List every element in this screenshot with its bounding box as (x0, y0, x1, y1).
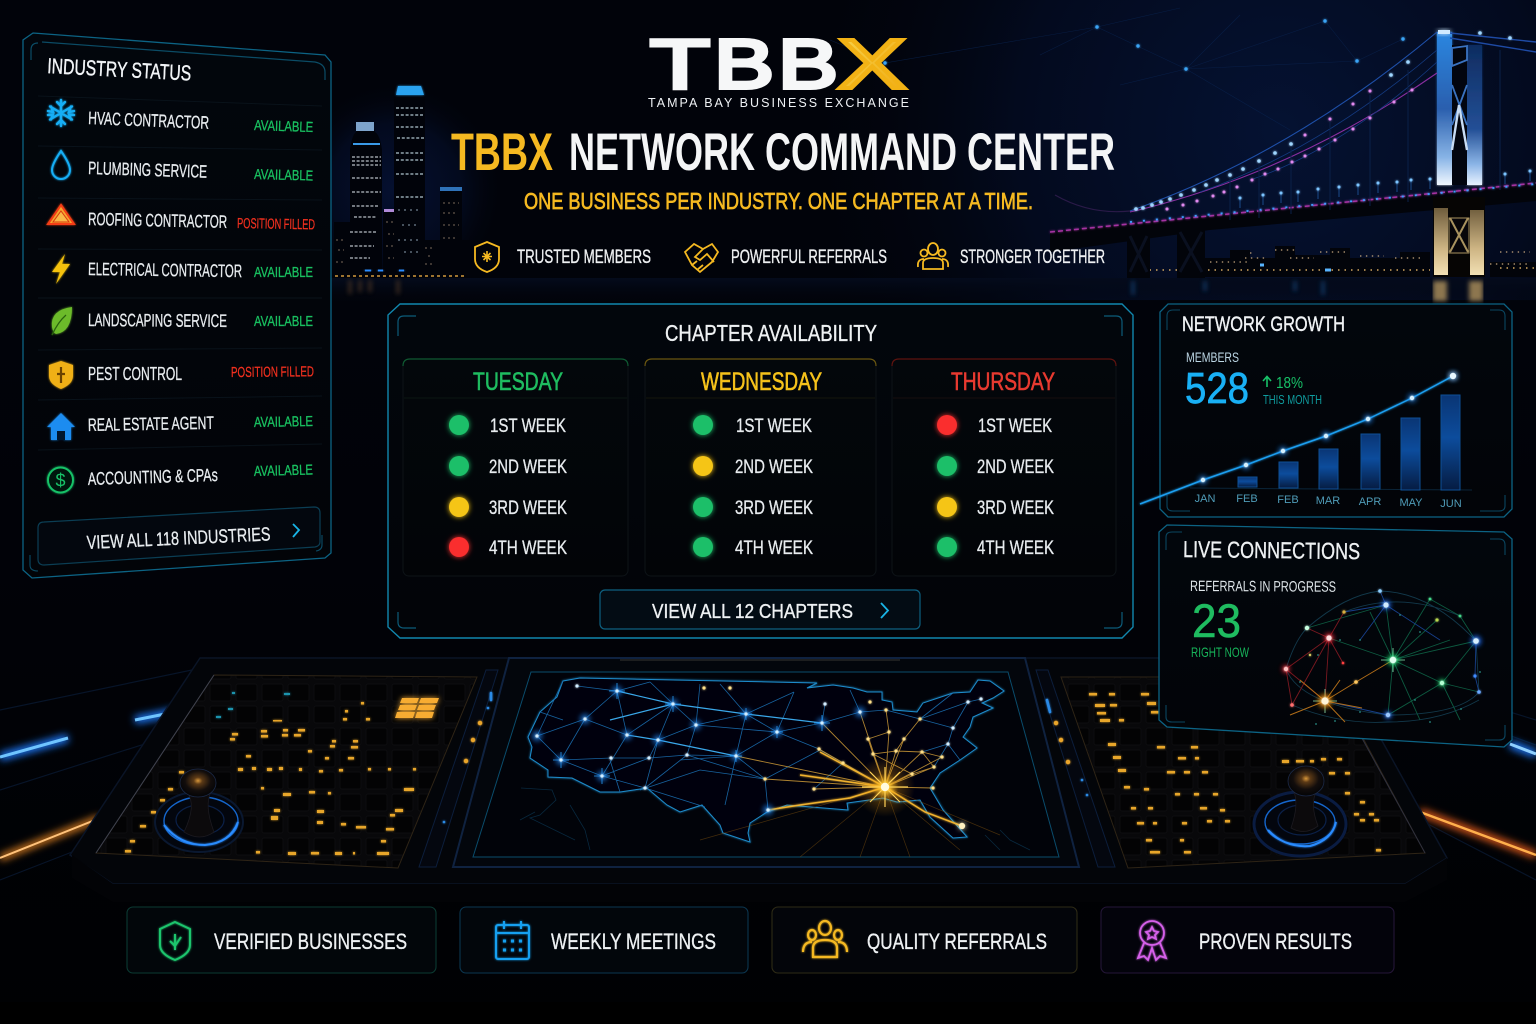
card: tuesday: TUESDAY (473, 368, 563, 396)
map: faint mexico and canada lines (520, 788, 1030, 850)
chart: axis labels: FEB (1236, 493, 1258, 505)
right now label: RIGHT NOW (1191, 644, 1250, 660)
icon: gold people (803, 921, 847, 957)
icon: shield (49, 361, 73, 389)
row: plumbing: AVAILABLE (254, 167, 314, 185)
logo: B (778, 25, 838, 103)
right joystick (1254, 766, 1346, 856)
center strips with lights (419, 670, 498, 867)
row: roofing: ROOFING CONTRACTOR (88, 209, 227, 232)
growth delta: 18% (1276, 375, 1303, 392)
members value: 528 (1185, 364, 1249, 413)
chart: axis labels: JUN (1440, 498, 1462, 510)
bottom stat: proven results (1101, 907, 1394, 973)
bridge deck (1050, 183, 1536, 252)
icon: three people (918, 243, 948, 269)
growth delta: THIS MONTH (1263, 392, 1322, 407)
map: node star rays (553, 683, 830, 784)
far skyline (1130, 246, 1536, 277)
row: roofing (48, 205, 315, 233)
small scattered nodes (1300, 615, 1480, 724)
map: network lines (537, 681, 981, 810)
shoreline lights (335, 275, 465, 277)
logo: TAMPA BAY BUSINESS EXCHANGE (648, 96, 909, 110)
card: tuesday: 4TH WEEK (489, 537, 567, 559)
logo: T (650, 25, 710, 103)
card: thursday: 1ST WEEK (978, 415, 1052, 437)
row: landscaping (52, 307, 313, 335)
bottom stat: quality referrals: QUALITY REFERRALS (867, 929, 1047, 954)
bridge (1050, 30, 1536, 301)
panel: chapter availability (388, 304, 1133, 638)
card: thursday: 2ND WEEK (977, 456, 1054, 478)
icon: snowflake (48, 100, 74, 126)
map: gold nodes (704, 688, 942, 789)
button: view all chapters: VIEW ALL 12 CHAPTERS (652, 600, 853, 623)
title: NETWORK COMMAND CENTER (569, 123, 1115, 182)
card: wednesday: 3RD WEEK (735, 497, 813, 519)
icon: dollar coin: $ (55, 470, 66, 490)
row: accounting: AVAILABLE (254, 462, 313, 480)
console body (70, 658, 1447, 884)
chart: axis labels (1195, 493, 1462, 510)
left panel indicator lights (125, 702, 416, 855)
heading: CHAPTER AVAILABILITY (665, 320, 877, 346)
chart: axis labels: JAN (1195, 493, 1215, 505)
logo (648, 25, 909, 110)
deck lamp posts (1240, 171, 1530, 208)
row: hvac: AVAILABLE (254, 118, 314, 136)
icon: dollar coin (48, 468, 73, 492)
card: tuesday (403, 359, 628, 576)
map: tampa hub flare (855, 757, 965, 829)
control console (70, 658, 1447, 902)
card: tuesday: 3RD WEEK (489, 497, 567, 519)
row: pest control: POSITION FILLED (231, 364, 314, 381)
tower one (350, 122, 382, 278)
chart: axis labels: FEB (1277, 494, 1299, 506)
chart: bars (1190, 395, 1472, 490)
bridge pier (1433, 197, 1485, 277)
button: view all industries: VIEW ALL 118 INDUSTRIES (86, 524, 271, 554)
row: real estate: AVAILABLE (254, 414, 313, 431)
row: accounting: ACCOUNTING & CPAs (87, 465, 218, 489)
icon: purple ribbon (1138, 921, 1166, 960)
card: thursday: 4TH WEEK (977, 537, 1054, 559)
side light streaks and deck floor (0, 660, 1536, 880)
map: blue node glows (537, 691, 860, 810)
icon: lightning bolt (52, 254, 70, 284)
row: pest control (49, 361, 314, 389)
icon: handshake (685, 244, 718, 272)
row: accounting (48, 462, 313, 492)
heading: LIVE CONNECTIONS (1183, 536, 1360, 564)
icon: warning roof (48, 205, 74, 224)
bridge tower (1437, 32, 1452, 185)
bottom stat: verified businesses: VERIFIED BUSINESSES (214, 929, 407, 954)
row: hvac (48, 100, 314, 136)
row: electrical: ELECTRICAL CONTRACTOR (88, 259, 242, 281)
network globe (1282, 589, 1482, 724)
title: TBBX (451, 123, 553, 182)
card: wednesday: 2ND WEEK (735, 456, 813, 478)
suspension cables (1130, 32, 1437, 211)
row: real estate: REAL ESTATE AGENT (88, 413, 214, 435)
low buildings (334, 187, 470, 278)
chart: axis labels: MAR (1316, 495, 1340, 507)
bottom stat: proven results: PROVEN RESULTS (1199, 929, 1352, 954)
bridge truss supports (1127, 226, 1205, 278)
bottom stat: weekly meetings (460, 907, 748, 973)
heading: NETWORK GROWTH (1182, 312, 1345, 336)
card: wednesday: 4TH WEEK (735, 537, 813, 559)
icon: trusted shield (475, 242, 499, 272)
button: view all chapters (600, 590, 920, 629)
bottom stat: quality referrals (772, 907, 1077, 973)
icon: house (47, 413, 75, 440)
left joystick (155, 769, 243, 852)
chart: growth line (1140, 373, 1456, 504)
chart: axis labels: MAY (1399, 497, 1423, 509)
icon: leaf (52, 307, 72, 335)
cable lights (1136, 33, 1510, 209)
logo: X (838, 25, 906, 103)
feature row: POWERFUL REFERRALS (731, 246, 887, 268)
icon: green shield (160, 922, 190, 960)
row: real estate (47, 413, 313, 440)
row: roofing: POSITION FILLED (237, 216, 315, 233)
card: tuesday: 2ND WEEK (489, 456, 567, 478)
card: wednesday: 1ST WEEK (736, 415, 812, 437)
row: plumbing (52, 151, 314, 185)
right panel indicator lights (1089, 693, 1381, 854)
panel: live connections (1159, 525, 1512, 747)
glowing amber key pad (395, 698, 439, 718)
node star rays (1313, 648, 1405, 713)
card: tuesday: 1ST WEEK (490, 415, 566, 437)
logo: B (714, 25, 774, 103)
subtitle: ONE BUSINESS PER INDUSTRY. ONE CHAPTER AT A TIME. (524, 188, 1033, 214)
card: wednesday (645, 359, 876, 576)
feature row (475, 242, 1105, 272)
city skyline at left (334, 86, 470, 294)
referrals value: 23 (1192, 594, 1241, 647)
row: landscaping: LANDSCAPING SERVICE (88, 310, 227, 331)
icon: water drop (52, 151, 70, 179)
map: blue nodes (537, 686, 981, 810)
right control plate (1061, 677, 1425, 868)
row: plumbing: PLUMBING SERVICE (88, 158, 207, 182)
row: hvac: HVAC CONTRACTOR (88, 108, 210, 133)
heading: INDUSTRY STATUS (47, 54, 192, 86)
node glows (1282, 600, 1482, 719)
referrals label: REFERRALS IN PROGRESS (1190, 578, 1336, 596)
chart: axis labels: APR (1359, 496, 1381, 508)
row: pest control: PEST CONTROL (88, 364, 182, 384)
row: electrical: AVAILABLE (254, 265, 313, 281)
button: view all industries (38, 507, 320, 565)
map: usa outline (528, 678, 1004, 842)
map screen frame (453, 658, 1079, 867)
card: thursday: 3RD WEEK (977, 497, 1054, 519)
panel: network growth (1140, 304, 1512, 517)
title (451, 123, 1115, 182)
card: wednesday: WEDNESDAY (701, 368, 822, 396)
growth delta (1263, 375, 1322, 407)
bottom stat: verified businesses (127, 907, 436, 973)
card: thursday (892, 359, 1116, 576)
card: thursday: THURSDAY (951, 368, 1055, 396)
background network constellation (830, 8, 1403, 130)
reflections (1440, 281, 1476, 301)
feature row: STRONGER TOGETHER (960, 246, 1105, 268)
panel: industry status (23, 33, 331, 578)
members label: MEMBERS (1186, 349, 1239, 365)
map: gold network around hub (736, 710, 942, 789)
bottom stat: weekly meetings: WEEKLY MEETINGS (551, 929, 716, 954)
row: electrical (52, 254, 313, 284)
left control plate (96, 675, 477, 868)
tower two (394, 86, 425, 278)
row: landscaping: AVAILABLE (254, 314, 313, 330)
feature row: TRUSTED MEMBERS (517, 246, 651, 268)
icon: blue calendar (496, 921, 529, 959)
